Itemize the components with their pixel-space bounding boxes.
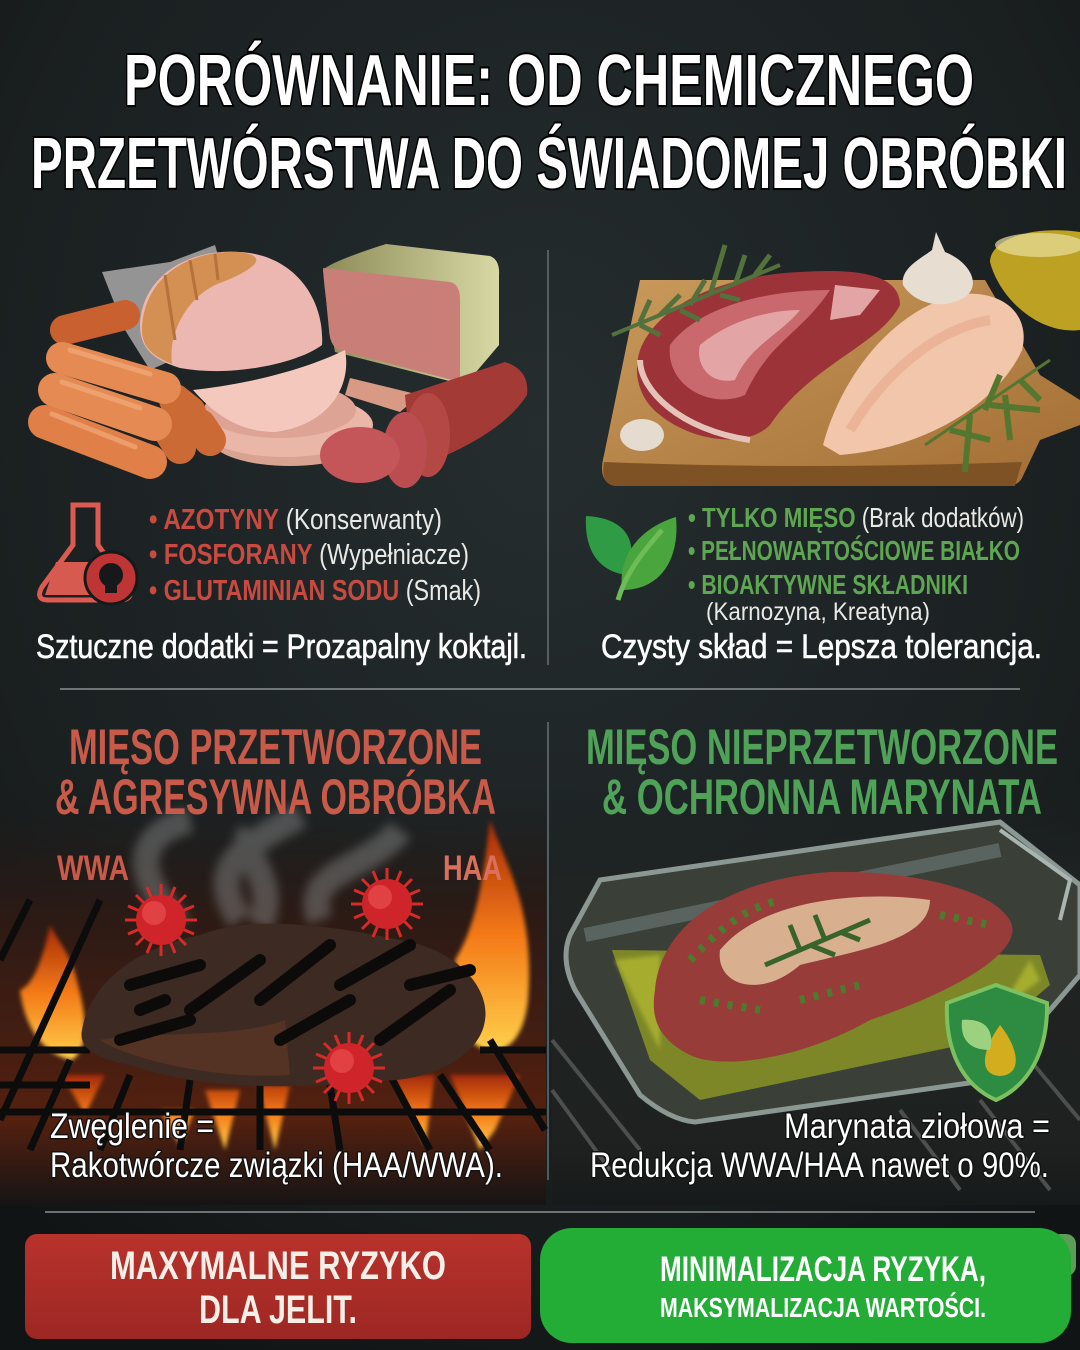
callout: max risk: MAXYMALNE RYZYKO [110,1244,446,1288]
icon: flask and skull [40,505,137,604]
smoke [146,815,400,925]
heading: processed [55,719,496,825]
icon: shield with oil drop [947,985,1047,1100]
icon: green leaves [586,516,677,600]
char marks [120,945,470,1040]
callout: min risk [540,1228,1076,1343]
list: clean ingredients: (Karnozyna, Kreatyna) [706,598,930,626]
rosemary sprig [765,915,870,965]
caption: charring [50,1107,503,1185]
canned meat [323,244,499,412]
virus icons [125,868,423,1104]
glass dish [566,822,1080,1122]
charred steak [82,924,486,1086]
ham slices [193,350,373,466]
package film [102,245,240,370]
label: WWA: WWA [57,849,129,888]
salami [320,362,527,488]
cutting board [602,280,1080,486]
list: clean ingredients: • BIOAKTYWNE SKŁADNIKI [688,569,968,600]
marinade [612,950,1050,1100]
oil jar [990,230,1080,330]
list: chemical additives: • AZOTYNY (Konserwanty) [149,504,442,536]
list: chemical additives [149,504,481,607]
caption: charring: Rakotwórcze związki (HAA/WWA). [50,1146,503,1185]
illustration: processed meats [45,244,527,488]
callout: max risk [25,1234,531,1339]
caption: marinade: Marynata ziołowa = [784,1107,1050,1146]
title [31,40,1067,204]
small garlic clove [620,419,664,451]
list: chemical additives: • GLUTAMINIAN SODU (Smak) [149,575,481,607]
heading: processed: MIĘSO PRZETWORZONE [69,719,482,775]
heading: processed: & AGRESYWNA OBRÓBKA [55,769,496,825]
caption: charring: Zwęglenie = [50,1107,214,1146]
thyme [925,360,1050,472]
list: clean ingredients: • TYLKO MIĘSO (Brak dodatków) [688,502,1024,533]
panel: marinade scene [552,780,1080,1205]
callout: min risk: MAKSYMALIZACJA WARTOŚCI. [660,1292,986,1323]
caption: additives: Sztuczne dodatki = Prozapalny koktajl. [36,628,527,666]
dividers [547,250,549,1180]
list: chemical additives: • FOSFORANY (Wypełniacze) [149,539,469,571]
chicken breast [823,294,1024,455]
marinated steak [654,872,1012,1062]
ribeye [637,271,900,440]
grill [0,900,546,1150]
panel: grilling scene [0,780,546,1205]
illustration: fresh meat on board [602,230,1080,486]
callout: max risk: DLA JELIT. [199,1288,357,1332]
caption: marinade [590,1107,1050,1185]
heading: unprocessed [586,719,1058,825]
list: clean ingredients [688,502,1024,626]
oven rack [552,1040,1080,1190]
rosemary [612,245,780,335]
sausages [45,315,210,462]
flames [20,820,529,1150]
label: HAA: HAA [443,849,502,888]
ham [140,252,322,371]
garlic [903,232,973,304]
